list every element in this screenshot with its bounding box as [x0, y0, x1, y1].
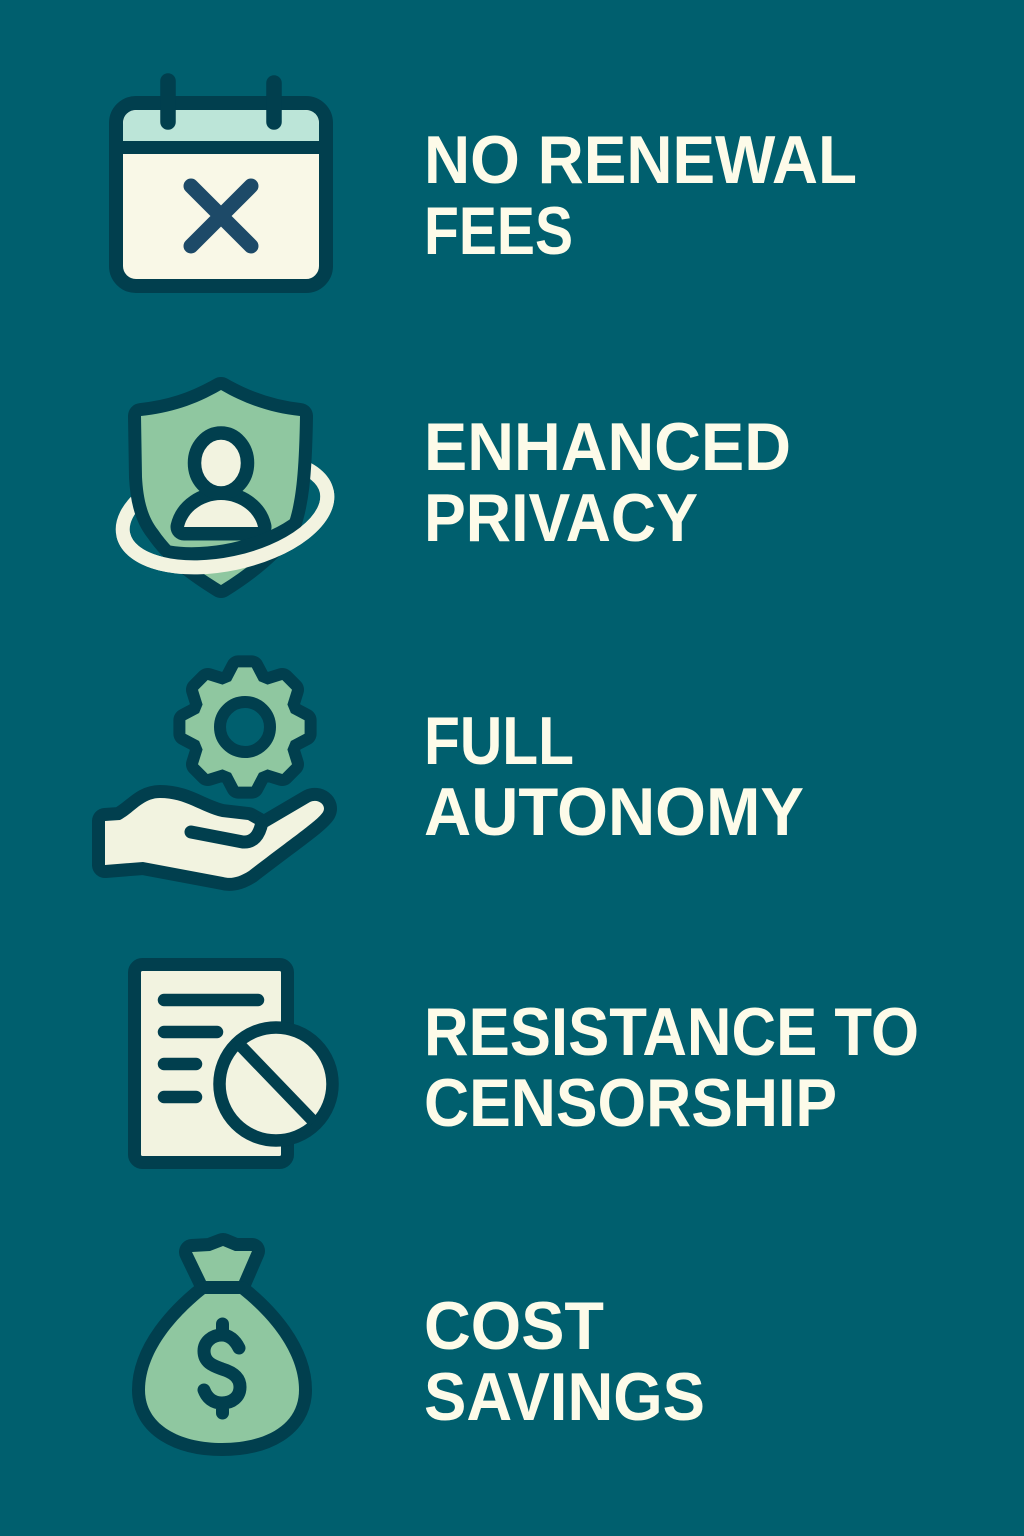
text: no renewal fees: NO RENEWAL	[424, 122, 857, 198]
text: enhanced privacy	[424, 409, 791, 556]
text: resistance to censorship: RESISTANCE TO	[424, 994, 919, 1070]
text: cost savings: COST	[424, 1288, 604, 1364]
text: enhanced privacy: PRIVACY	[424, 480, 698, 556]
icon: money bag with dollar sign	[145, 1246, 299, 1443]
text: full autonomy: AUTONOMY	[424, 774, 804, 850]
icon: document with prohibition sign	[134, 964, 332, 1162]
text: resistance to censorship: CENSORSHIP	[424, 1065, 837, 1141]
text: no renewal fees: FEES	[424, 193, 573, 269]
infographic canvas	[92, 73, 916, 1456]
icon: privacy shield with person and orbit ring	[113, 390, 337, 585]
text: cost savings	[424, 1288, 705, 1435]
icon: calendar with X	[116, 81, 326, 286]
text: enhanced privacy: ENHANCED	[424, 409, 791, 485]
text: full autonomy	[424, 703, 804, 850]
text: full autonomy: FULL	[424, 703, 574, 779]
text: cost savings: SAVINGS	[424, 1359, 705, 1435]
text: no renewal fees	[424, 122, 857, 269]
text: resistance to censorship	[424, 994, 919, 1141]
icon: gear over open hand	[105, 667, 324, 878]
